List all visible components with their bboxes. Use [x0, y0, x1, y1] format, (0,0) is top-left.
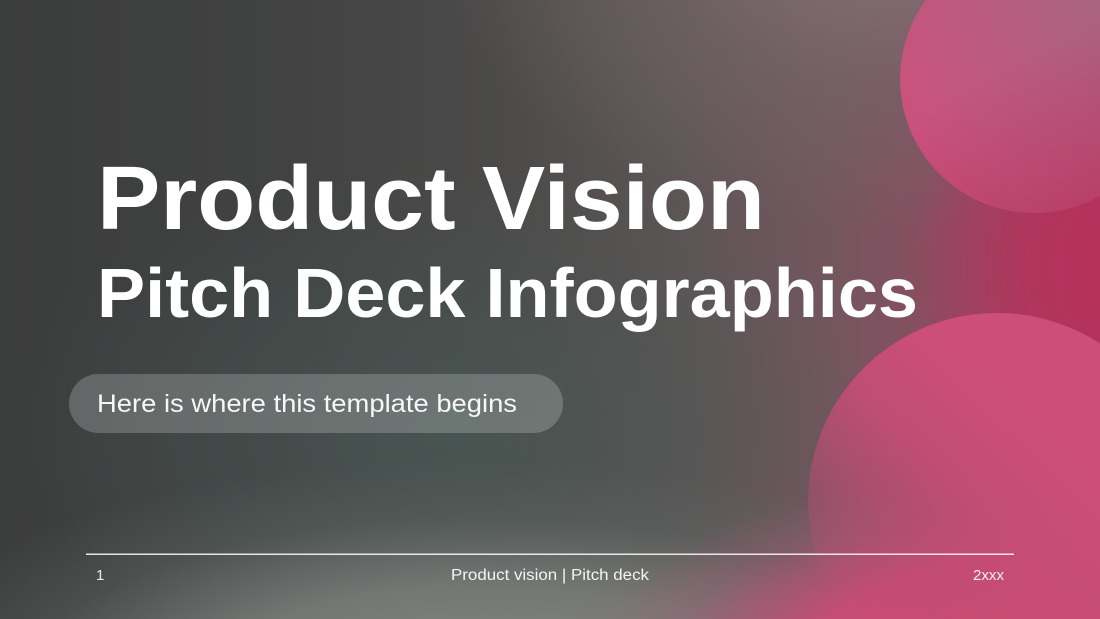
decorative circle: bottom right	[808, 313, 1100, 619]
footer page number: 1	[96, 567, 104, 584]
subtitle heading: Pitch Deck Infographics: Pitch Deck Infographics	[97, 254, 918, 332]
pill: tagline	[69, 374, 563, 433]
decorative circle: top right	[900, 0, 1100, 213]
footer date: 2xxx	[973, 567, 1005, 584]
title: Product Vision: Product Vision	[97, 149, 765, 249]
footer	[86, 554, 1014, 584]
footer deck name: Product vision | Pitch deck	[451, 567, 649, 584]
pill: tagline: Here is where this template begins	[97, 390, 517, 418]
